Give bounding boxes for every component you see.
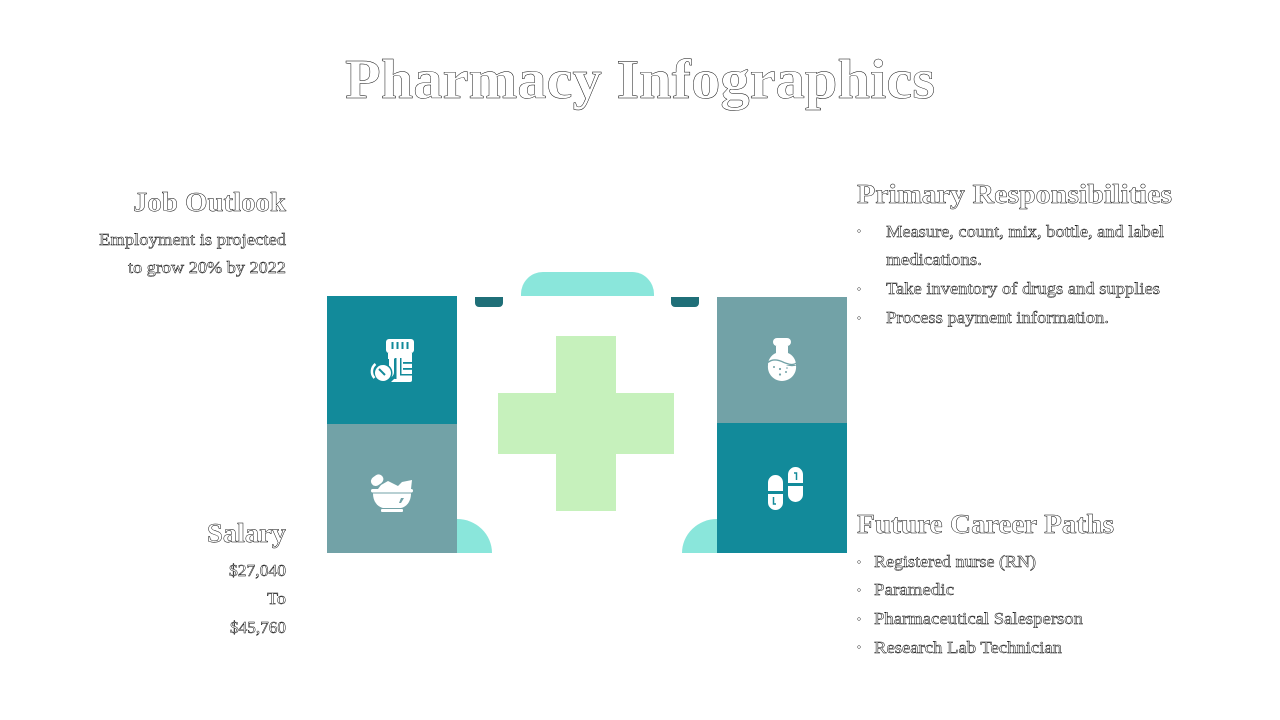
- panel: salary: [207, 518, 287, 637]
- text block: salary range: [229, 561, 286, 637]
- right foot: [682, 519, 717, 553]
- heading: future career paths: Future Career Paths: [857, 509, 1114, 539]
- list: career paths: Research Lab Technician: [874, 638, 1063, 657]
- right latch: [671, 297, 699, 307]
- panel: primary responsibilities: [857, 179, 1172, 327]
- panel: job outlook: [99, 187, 287, 277]
- panel: bottom left tile: [327, 424, 457, 553]
- list: career paths: Paramedic: [874, 580, 954, 599]
- text block: job outlook description: [99, 230, 287, 277]
- left latch: [475, 297, 503, 307]
- text block: salary range: $45,760: [230, 618, 286, 637]
- icon: flask: [768, 338, 796, 381]
- list: responsibilities: Measure, count, mix, bottle, and label: [886, 222, 1164, 241]
- list: career paths: Registered nurse (RN): [874, 552, 1036, 571]
- heading: primary responsibilities: Primary Responsibilities: [857, 179, 1172, 209]
- panel: top left tile: [327, 296, 457, 424]
- text block: salary range: To: [267, 589, 286, 608]
- panel: bottom right tile: [717, 423, 847, 553]
- list: responsibilities: [858, 222, 1164, 327]
- left foot: [457, 519, 492, 553]
- medical cross: [498, 336, 674, 511]
- icon: mortar and pestle: [369, 473, 413, 512]
- list: responsibilities: Process payment information.: [886, 308, 1109, 327]
- icon: medicine bottle with pill: [372, 339, 414, 382]
- list: career paths: Pharmaceutical Salesperson: [874, 609, 1084, 628]
- heading: job outlook: Job Outlook: [133, 187, 286, 217]
- list: career paths: [858, 552, 1084, 657]
- list: responsibilities: medications.: [886, 250, 982, 269]
- panel: top right tile: [717, 297, 847, 423]
- heading: salary: Salary: [207, 518, 287, 548]
- text block: job outlook description: to grow 20% by 2022: [128, 258, 286, 277]
- icon: capsules: [768, 467, 803, 510]
- title: Pharmacy Infographics: [345, 49, 935, 111]
- panel: future career paths: [857, 509, 1114, 657]
- text block: salary range: $27,040: [229, 561, 286, 580]
- kit handle: [521, 272, 654, 296]
- medical kit illustration: [327, 272, 847, 553]
- text block: job outlook description: Employment is projected: [99, 230, 287, 249]
- list: responsibilities: Take inventory of drugs and supplies: [886, 279, 1160, 298]
